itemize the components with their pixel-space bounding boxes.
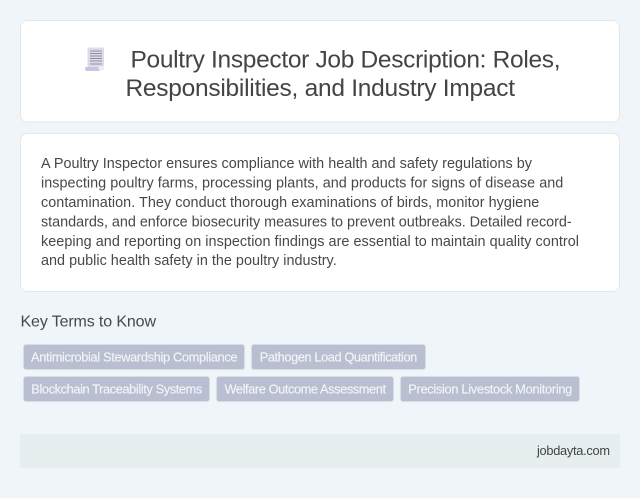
chip: pathogen load quantification: Pathogen Load Quantification: [260, 350, 417, 364]
chip: welfare outcome assessment: [216, 376, 394, 402]
chip: pathogen load quantification: [252, 344, 426, 370]
description text: contamination. They conduct thorough examinations of birds, monitor hygiene: [41, 195, 539, 211]
description text: keeping and reporting on inspection findings are essential to maintain quality control: [41, 234, 579, 250]
description text: inspecting poultry farms, processing plants, and products for signs of disease and: [41, 176, 563, 192]
footer site name: jobdayta.com: [536, 443, 610, 458]
panel: title card: [20, 20, 620, 122]
panel: description card: [20, 134, 620, 292]
chip: antimicrobial stewardship compliance: [24, 344, 244, 370]
icon: document scroll: [85, 48, 104, 71]
heading: key terms: Key Terms to Know: [20, 314, 156, 330]
key term chips: [24, 344, 580, 402]
chip: welfare outcome assessment: Welfare Outcome Assessment: [224, 382, 386, 396]
title: Responsibilities, and Industry Impact: [126, 75, 515, 102]
description text: A Poultry Inspector ensures compliance with health and safety regulations by: [41, 156, 533, 172]
description text: and public health safety in the poultry industry.: [41, 253, 337, 269]
title: Poultry Inspector Job Description: Roles,: [130, 46, 560, 74]
title: [126, 46, 560, 102]
chip: antimicrobial stewardship compliance: Antimicrobial Stewardship Compliance: [31, 350, 238, 364]
chip: precision livestock monitoring: [400, 376, 580, 402]
footer bar: [20, 434, 620, 468]
description text: standards, and enforce biosecurity measures to prevent outbreaks. Detailed record-: [41, 214, 572, 230]
description text: [41, 156, 579, 269]
chip: blockchain traceability systems: Blockchain Traceability Systems: [31, 382, 202, 396]
chip: precision livestock monitoring: Precision Livestock Monitoring: [408, 382, 572, 396]
chip: blockchain traceability systems: [24, 376, 210, 402]
